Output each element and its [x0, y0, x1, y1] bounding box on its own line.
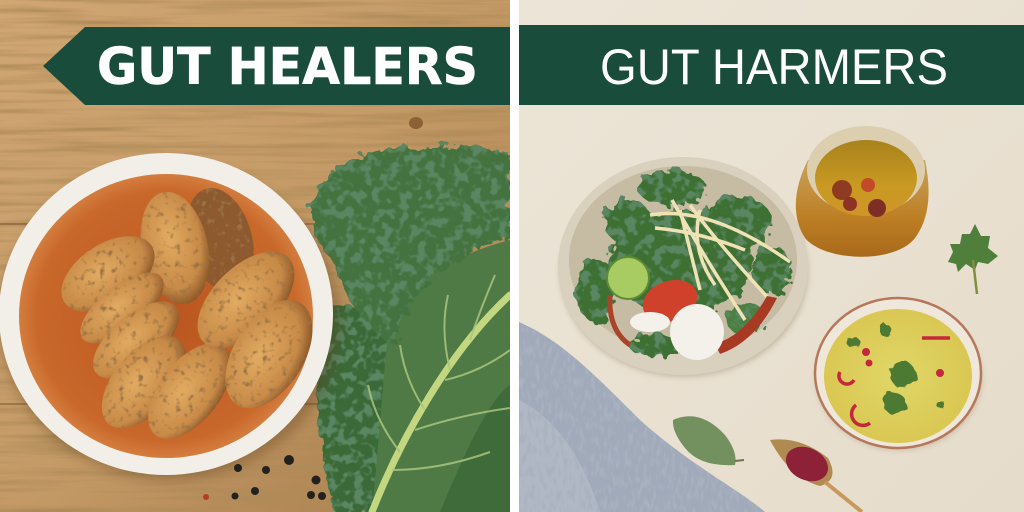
banner: gut healers	[43, 27, 510, 105]
mozzarella	[630, 304, 724, 360]
tomato broth	[19, 174, 330, 458]
spoon with spice	[770, 439, 862, 512]
grey cloth	[519, 322, 765, 512]
panel: gut healers	[0, 0, 510, 512]
curly kale lower left	[316, 300, 410, 512]
kale leaf	[310, 145, 510, 512]
white bowl	[0, 153, 333, 475]
bowl shadow	[0, 164, 340, 480]
salad greens	[576, 170, 792, 357]
smooth leaf blade	[372, 240, 510, 512]
herb sprig	[948, 224, 998, 294]
salad bowl	[558, 157, 808, 377]
wooden table background	[0, 0, 510, 512]
divider	[510, 0, 519, 512]
chicken patties	[48, 181, 330, 454]
peppercorns	[203, 455, 326, 500]
noodles	[650, 200, 790, 320]
bay leaf	[673, 416, 744, 465]
cream background	[519, 0, 1024, 512]
curly kale upper	[310, 145, 510, 345]
oil jar	[796, 126, 929, 257]
tomato	[637, 273, 703, 329]
panel: gut harmers	[519, 0, 1024, 512]
yellow soup bowl	[815, 298, 982, 450]
heading: gut healers: GUT HEALERS	[97, 38, 478, 97]
heading: gut harmers: GUT HARMERS	[600, 39, 948, 95]
cucumber	[607, 257, 649, 299]
banner: gut harmers	[519, 25, 1024, 105]
